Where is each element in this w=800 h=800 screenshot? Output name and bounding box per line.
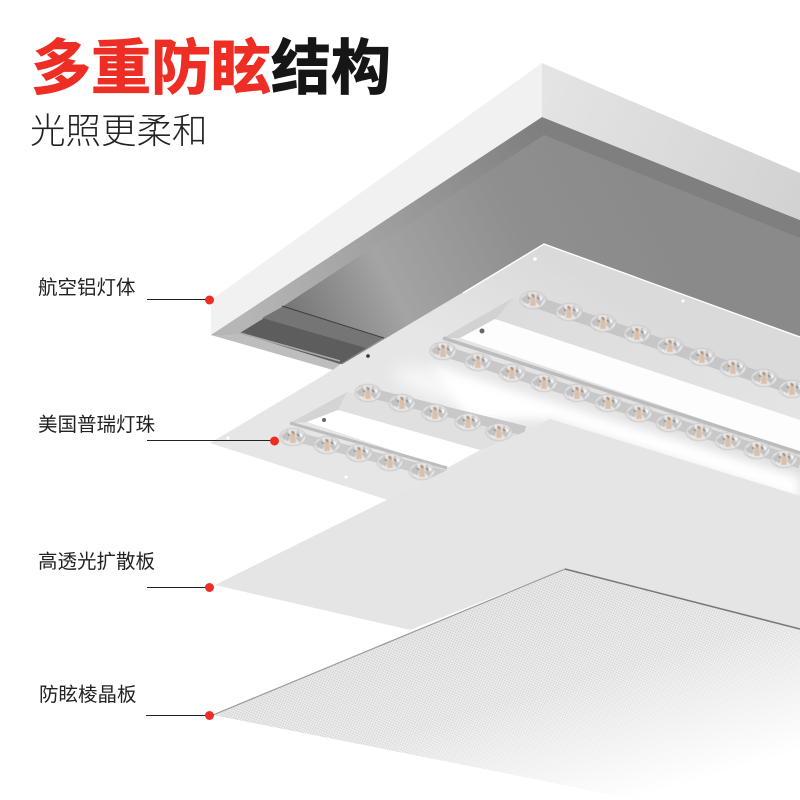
LED row 4 xyxy=(280,428,436,480)
diffuser plate xyxy=(215,419,800,640)
lower module slanted reflector xyxy=(290,392,347,423)
right rim shadow band xyxy=(542,117,800,238)
panel mounting holes xyxy=(226,257,684,478)
panel bright edge xyxy=(463,244,800,337)
prism surface xyxy=(213,569,800,800)
panel plate xyxy=(210,244,800,500)
label: housing: 航空铝灯体 xyxy=(38,277,136,299)
label: LED beads: 美国普瑞灯珠 xyxy=(38,414,156,436)
right white face xyxy=(542,63,800,220)
prism left edge xyxy=(213,569,565,715)
row 1 band xyxy=(524,298,800,391)
row 2 glow xyxy=(430,365,800,500)
housing interior xyxy=(211,117,800,420)
label: diffuser xyxy=(38,551,214,592)
LED row 2 xyxy=(430,342,798,468)
lamp housing xyxy=(211,63,800,420)
row 4 band xyxy=(285,434,445,475)
label: diffuser: 高透光扩散板 xyxy=(38,551,155,573)
LED panel xyxy=(210,244,800,500)
title: 多重防眩 xyxy=(31,35,271,102)
label: prism: 防眩棱晶板 xyxy=(39,684,137,706)
prism fade to white xyxy=(213,569,800,800)
upper module opening xyxy=(460,319,800,452)
LED row 3 xyxy=(354,384,512,441)
label: prism xyxy=(39,684,214,720)
left white face xyxy=(211,63,542,335)
lower module reflector xyxy=(290,392,525,450)
inner channel xyxy=(240,306,384,364)
lower module opening xyxy=(307,410,480,468)
prism right edge xyxy=(565,569,800,629)
panel glow xyxy=(389,360,501,416)
lower module screw xyxy=(322,418,326,422)
upper module rail xyxy=(443,338,800,453)
upper module slanted reflector xyxy=(443,298,513,338)
title xyxy=(31,35,391,102)
label: LED beads xyxy=(38,414,279,446)
row 3 band xyxy=(358,390,525,431)
label: housing xyxy=(38,277,214,304)
row 2 band xyxy=(434,348,800,463)
upper module reflector xyxy=(443,298,800,420)
LED row 1 xyxy=(520,291,800,398)
subtitle: 光照更柔和 xyxy=(30,111,208,151)
upper module screw xyxy=(480,328,484,334)
lower module rail xyxy=(290,423,447,468)
prism plate xyxy=(213,569,800,800)
left rim band xyxy=(211,117,544,335)
bottom rim xyxy=(211,333,341,370)
title: 结构 xyxy=(271,35,391,102)
